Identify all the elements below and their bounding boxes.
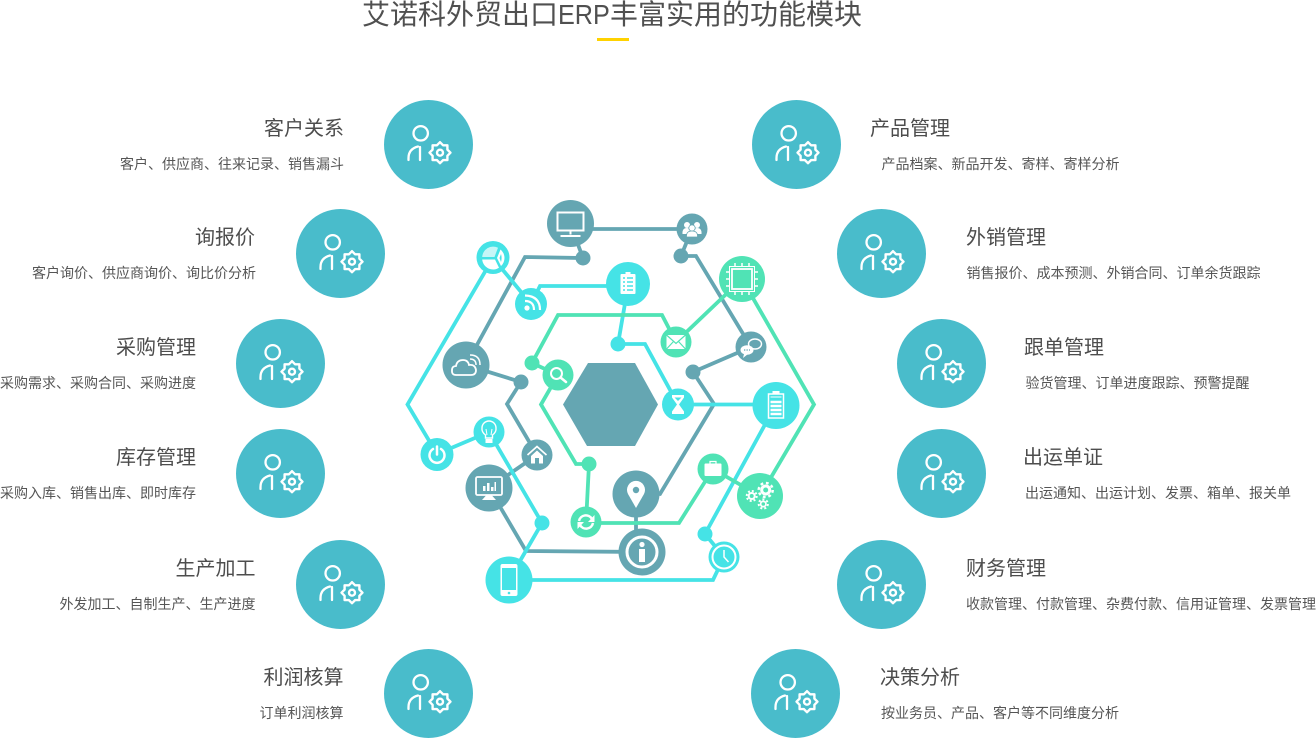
node dots [514, 248, 712, 542]
module: 出运单证 [897, 429, 1291, 518]
module: 出运单证: 出运单证 [1023, 446, 1103, 469]
icon: chat [736, 332, 766, 362]
module: 决策分析 [751, 649, 1119, 738]
icon: refresh [570, 506, 602, 538]
module: 库存管理 [0, 429, 325, 518]
module: 外销管理 [837, 209, 1260, 298]
module: 生产加工 [60, 540, 385, 629]
module: 库存管理: 采购入库、销售出库、即时库存 [0, 485, 196, 501]
icon: search [542, 360, 574, 390]
module: 利润核算 [260, 649, 473, 738]
module: 跟单管理: 跟单管理 [1024, 336, 1104, 359]
title [362, 0, 862, 30]
connector lines: cyan [408, 258, 776, 580]
icon: mail [660, 326, 692, 358]
module: 决策分析: 按业务员、产品、客户等不同维度分析 [881, 705, 1119, 721]
icon: location pin [612, 470, 660, 518]
module: 采购管理 [0, 319, 325, 408]
module: 采购管理: 采购需求、采购合同、采购进度 [0, 375, 196, 391]
icon: clock [708, 542, 740, 572]
module: 生产加工: 生产加工 [176, 557, 256, 580]
icon: display chart [466, 464, 512, 512]
module: 采购管理: 采购管理 [116, 336, 196, 359]
module: 询报价: 询报价 [195, 226, 255, 249]
connector lines: green [532, 279, 814, 523]
module: 询报价 [32, 209, 385, 298]
module: 出运单证: 出运通知、出运计划、发票、箱单、报关单 [1025, 485, 1291, 501]
central network diagram [408, 200, 814, 604]
icon: hourglass [662, 388, 694, 420]
module: 财务管理: 收款管理、付款管理、杂费付款、信用证管理、发票管理 [966, 596, 1316, 612]
icon: monitor [547, 200, 594, 247]
icon: cloud [442, 342, 490, 388]
icon: battery [752, 382, 800, 429]
module: 决策分析: 决策分析 [880, 666, 960, 689]
module: 利润核算: 订单利润核算 [260, 705, 344, 721]
module: 生产加工: 外发加工、自制生产、生产进度 [60, 596, 256, 612]
module: 客户关系: 客户、供应商、往来记录、销售漏斗 [120, 156, 344, 172]
module: 外销管理: 外销管理 [966, 226, 1046, 249]
module: 产品管理 [752, 100, 1120, 189]
icon: clipboard [606, 262, 650, 306]
module: 产品管理: 产品档案、新品开发、寄样、寄样分析 [882, 156, 1120, 172]
module: 询报价: 客户询价、供应商询价、询比价分析 [32, 265, 256, 281]
module: 利润核算: 利润核算 [264, 666, 344, 689]
module: 财务管理: 财务管理 [966, 557, 1046, 580]
module: 跟单管理 [897, 319, 1250, 408]
module: 财务管理 [837, 540, 1316, 629]
icon: phone [486, 556, 532, 604]
module: 外销管理: 销售报价、成本预测、外销合同、订单余货跟踪 [966, 265, 1260, 281]
icon: briefcase [698, 454, 728, 484]
connector lines: grey [466, 223, 751, 552]
module: 库存管理: 库存管理 [116, 446, 196, 469]
icon: pie chart [476, 241, 510, 274]
icon: power [420, 438, 454, 471]
module: 跟单管理: 验货管理、订单进度跟踪、预警提醒 [1026, 375, 1250, 391]
module: 产品管理: 产品管理 [870, 117, 950, 140]
icon: team [676, 214, 708, 244]
central hexagon [563, 363, 658, 446]
module: 客户关系: 客户关系 [264, 117, 344, 140]
icon: house [522, 440, 552, 470]
icon: info [618, 528, 666, 576]
icon: gears [737, 473, 783, 519]
module: 客户关系 [120, 100, 473, 189]
title accent bar [597, 38, 629, 41]
icon: rss [515, 288, 547, 320]
icon: chip [719, 256, 765, 302]
icon: light bulb [474, 416, 504, 448]
